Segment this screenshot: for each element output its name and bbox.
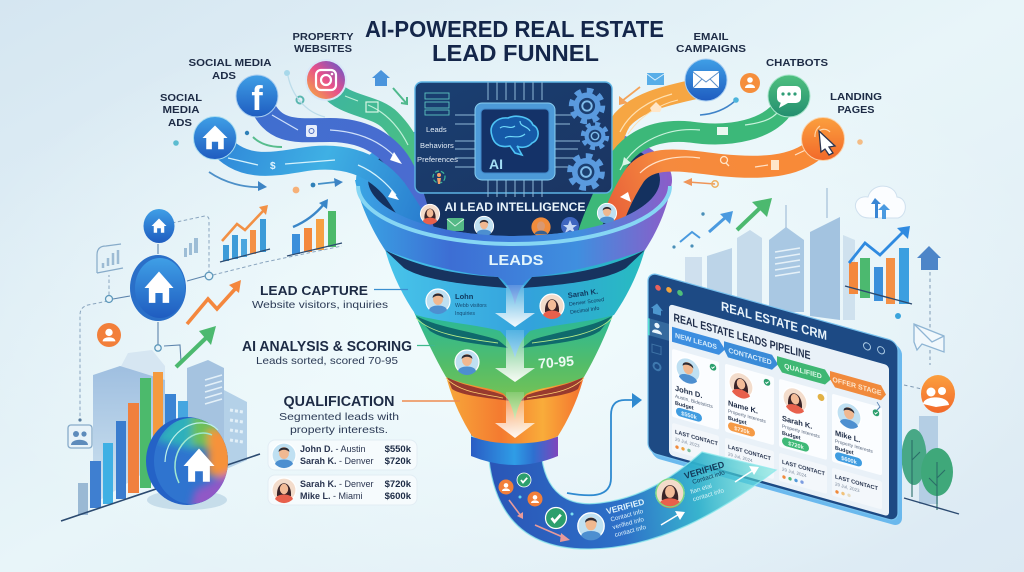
- source labels: PAGES: [838, 104, 874, 116]
- lead column: John D.: 29 Jul, 2023: [675, 437, 700, 449]
- verified lead one: VERIFIED: [605, 497, 645, 516]
- source labels: ADS: [212, 70, 236, 82]
- lead column: Mike L.: Mike L.: [835, 428, 860, 444]
- icon: facebook: f: [251, 80, 263, 118]
- source labels: WEBSITES: [294, 43, 352, 55]
- CRM main panel: [669, 304, 889, 516]
- panel labels: Behaviors: [420, 141, 454, 150]
- panel labels: [417, 125, 458, 164]
- stage: AI analysis and scoring: Leads sorted, scored 70-95: [256, 355, 398, 367]
- pipeline stages: [672, 327, 886, 402]
- label: AI lead intelligence: AI LEAD INTELLIGENCE: [444, 202, 586, 214]
- lead column: Sarah K.: [779, 379, 827, 494]
- lead column: John D.: LAST CONTACT: [675, 430, 718, 448]
- funnel tier: AI analysis: [414, 312, 614, 420]
- panel labels: Leads: [426, 125, 447, 134]
- stream: property websites: [330, 88, 420, 175]
- stage: qualification: [279, 394, 399, 436]
- lead column: Name K.: 29 Jul, 2024: [728, 451, 753, 463]
- source labels: MEDIA: [162, 104, 200, 116]
- lead column: Sarah K.: Property Interests: [782, 424, 820, 440]
- left network of icons: [68, 209, 342, 448]
- icon: orange person: [97, 323, 121, 347]
- icon: envelope chat: [914, 324, 944, 352]
- funnel lead John: Webb visitors: [455, 303, 487, 309]
- icon: facebook: [236, 75, 278, 118]
- stream mini icons: [270, 102, 779, 172]
- source labels: ADS: [168, 117, 192, 129]
- icon: house: [194, 116, 236, 160]
- stream mini icons: $: [270, 161, 276, 172]
- lead card: John and Sarah: $550k: [385, 444, 412, 455]
- lead column: John D.: John D.: [675, 384, 702, 400]
- output pipe: [488, 450, 776, 549]
- lead column: John D.: $550k: [681, 411, 698, 422]
- chip with brain: [475, 103, 555, 180]
- funnel lead John: Lohn: [455, 292, 474, 301]
- window controls: [655, 283, 683, 298]
- icon: instagram: [305, 59, 347, 101]
- stream: email campaigns: [610, 88, 700, 165]
- pipeline heading: REAL ESTATE LEADS PIPELINE: [674, 311, 811, 362]
- icon: large house circle: [130, 255, 186, 321]
- title: LEAD FUNNEL: [432, 40, 599, 66]
- stream: social media ads: [218, 142, 420, 230]
- stage: lead capture: LEAD CAPTURE: [260, 284, 368, 298]
- icon: small orbit person: [433, 171, 445, 184]
- verified lead two: Contact info: [692, 469, 726, 486]
- CRM title: REAL ESTATE CRM: [721, 299, 827, 343]
- lead card: Sarah and Mike: $600k: [385, 491, 412, 502]
- verified lead one: contact info: [614, 524, 647, 539]
- source labels: EMAIL: [694, 31, 729, 43]
- icon: email: [685, 59, 727, 101]
- lead column: Sarah K.: 29 Jul, 2024: [782, 467, 807, 478]
- icon: blue house: [917, 246, 941, 270]
- trees: [902, 416, 959, 514]
- verified lead two: VERIFIED: [683, 459, 726, 481]
- gears: [571, 91, 607, 187]
- funnel tier: lead capture: [384, 245, 646, 358]
- lead column: Name K.: Name K.: [728, 399, 758, 416]
- funnel rim front band with leads label: [355, 180, 672, 305]
- verified lead one: Contact info: [610, 508, 645, 524]
- chart: left small chart B: [287, 199, 342, 256]
- icon: cursor: [802, 118, 844, 160]
- lead column: Name K.: [725, 364, 774, 479]
- right chart: [845, 226, 912, 304]
- CRM sidebar icons: [648, 301, 669, 373]
- lead card: John and Sarah: $720k: [385, 456, 412, 467]
- stage: AI analysis and scoring: [242, 339, 412, 367]
- lead card: Sarah and Mike: Sarah K. - Denver: [300, 479, 374, 489]
- lead card: John and Sarah: John D. - Austin: [300, 444, 366, 454]
- CRM top icons: [864, 342, 884, 355]
- lead column: John D.: [672, 349, 719, 464]
- right city: [672, 188, 855, 320]
- source labels: SOCIAL MEDIA: [188, 57, 272, 69]
- stream: landing pages: [612, 145, 820, 222]
- stage: lead capture: [252, 284, 388, 311]
- lead card: Sarah and Mike: $720k: [385, 479, 412, 490]
- panel labels: Preferences: [417, 155, 458, 164]
- funnel lead Sarah: Sarah K.: [567, 287, 599, 300]
- stream: chatbots: [588, 105, 785, 235]
- verified lead two: [656, 459, 759, 508]
- chart: left small chart A: [220, 205, 270, 262]
- verified lead two: contact info: [692, 487, 725, 503]
- pipeline stages: CONTACTED: [728, 347, 772, 367]
- left city and bar chart: [61, 280, 260, 521]
- lead column: Mike L.: [832, 394, 882, 510]
- title: [365, 16, 664, 66]
- stage: lead capture: Website visitors, inquiries: [252, 299, 388, 311]
- left data forms: [425, 93, 449, 115]
- icon: big gradient house disc: [146, 417, 228, 510]
- icon: orange people: [921, 375, 955, 413]
- lead column: Name K.: LAST CONTACT: [728, 444, 771, 463]
- funnel lead Sarah: Decimal Info: [570, 306, 600, 316]
- funnel rim back: [356, 118, 672, 242]
- stream: facebook: [262, 105, 422, 230]
- CRM window: [648, 272, 902, 527]
- lead card: Sarah and Mike: Mike L. - Miami: [300, 491, 363, 501]
- icon: chatbot: [768, 75, 810, 117]
- source labels: LANDING: [830, 91, 882, 103]
- icon: people chat: [68, 425, 92, 448]
- icon: mini chart card: [97, 244, 123, 273]
- verified lead two: fian etai: [690, 483, 713, 496]
- decorative floating icons, right: [619, 73, 863, 187]
- pipe status icons: [498, 473, 574, 542]
- lead column: Name K.: Property Interests: [728, 408, 766, 425]
- pipeline stages: QUALIFIED: [784, 362, 822, 381]
- source labels: CHATBOTS: [766, 57, 828, 69]
- icon: mini bars: [184, 238, 198, 257]
- funnel lead Sarah: Denver Scored: [569, 297, 605, 308]
- lead column: John D.: Austin, Bidetsticts: [675, 394, 713, 410]
- lead column: Name K.: Budget: [728, 415, 747, 427]
- lead column: Sarah K.: Budget: [782, 431, 801, 442]
- lead column: Name K.: $720k: [734, 426, 751, 436]
- stage: qualification: Segmented leads with: [279, 411, 399, 423]
- funnel lead John: Inquiries: [455, 311, 475, 317]
- lead column: Sarah K.: Sarah K.: [782, 414, 812, 431]
- funnel lead John: [426, 289, 487, 317]
- lead card: Sarah and Mike: [268, 475, 417, 505]
- lead column: Sarah K.: LAST CONTACT: [782, 460, 825, 478]
- stage: qualification: QUALIFICATION: [284, 394, 394, 410]
- lead column: Mike L.: Budget: [835, 445, 854, 457]
- verified lead one: verified info: [612, 516, 645, 531]
- right network icons: [895, 246, 959, 514]
- funnel lead Sarah: [540, 286, 606, 319]
- funnel flow arrows: [495, 285, 535, 438]
- icon: upload cloud: [855, 186, 905, 219]
- icon: small house circle: [144, 209, 174, 243]
- verified lead one: [578, 497, 685, 540]
- funnel rim front band with leads label: LEADS: [488, 253, 544, 269]
- chip pins: [455, 82, 580, 197]
- funnel tier: qualification: [446, 376, 584, 444]
- funnel lead with score: [455, 350, 575, 375]
- lead column: Mike L.: LAST CONTACT: [835, 474, 878, 492]
- arrows above city: [672, 198, 772, 249]
- source labels: PROPERTY: [292, 31, 354, 43]
- lead column: John D.: Budget: [675, 401, 694, 412]
- chip with brain: AI: [489, 156, 503, 172]
- decorative floating icons and arrows, left: [173, 70, 407, 193]
- funnel interior avatars: [420, 203, 617, 237]
- panel: AI lead intelligence: [415, 82, 612, 197]
- stage: AI analysis and scoring: AI ANALYSIS & SCORING: [242, 339, 412, 355]
- lead column: Mike L.: 29 Jul, 2023: [835, 481, 860, 493]
- lead card: John and Sarah: Sarah K. - Denver: [300, 456, 374, 466]
- funnel neck: [471, 434, 558, 465]
- icon sources: [194, 59, 844, 160]
- lead column: Sarah K.: $720k: [788, 441, 805, 452]
- source labels: SOCIAL: [160, 92, 203, 104]
- lead column: Mike L.: Property Interests: [835, 438, 873, 455]
- lead column: Mike L.: $600k: [841, 456, 858, 466]
- funnel lead with score: 70-95: [537, 352, 575, 372]
- lead card: John and Sarah: [268, 440, 417, 470]
- title: AI-POWERED REAL ESTATE: [365, 16, 664, 42]
- pipeline stages: NEW LEADS: [675, 332, 717, 351]
- arrow to CRM: [567, 393, 642, 495]
- stage: qualification: property interests.: [290, 424, 388, 436]
- source labels: [160, 31, 882, 129]
- source labels: CAMPAIGNS: [676, 43, 746, 55]
- pipeline stages: OFFER STAGE: [832, 376, 882, 397]
